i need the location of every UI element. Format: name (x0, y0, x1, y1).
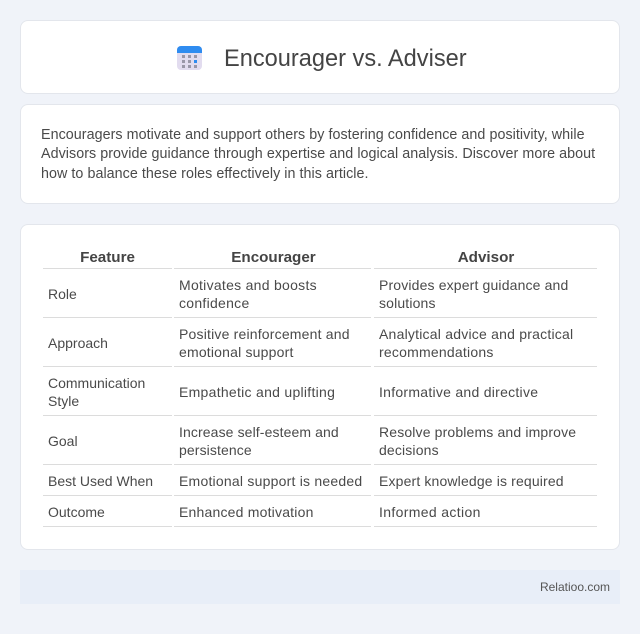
row: role (48, 277, 568, 311)
intro text: how to balance these roles effectively in this article. (41, 166, 369, 182)
table header: Feature (80, 249, 135, 266)
row: outcome: Informed action (379, 504, 481, 520)
row: best used when: Best Used When (48, 473, 153, 489)
row: goal: decisions (379, 442, 439, 458)
row: approach: Positive reinforcement and (179, 326, 350, 342)
row: role: Role (48, 286, 77, 302)
row: role: Motivates and boosts (179, 277, 317, 293)
table header: Advisor (458, 249, 514, 266)
intro text: Advisors provide guidance through expertise and logical analysis. Discover more about (41, 146, 595, 162)
row: outcome (48, 504, 481, 520)
footer bar (20, 570, 620, 604)
title: Encourager vs. Adviser (224, 46, 467, 72)
intro text: Encouragers motivate and support others by fostering confidence and positivity, while (41, 127, 585, 143)
row: best used when: Expert knowledge is required (379, 473, 564, 489)
icon: calendar (177, 46, 202, 70)
row: goal: persistence (179, 442, 252, 458)
row: approach (48, 326, 573, 360)
row: best used when (48, 473, 564, 489)
row: approach: Analytical advice and practical (379, 326, 573, 342)
row: goal: Resolve problems and improve (379, 424, 576, 440)
title card (20, 20, 620, 94)
row: outcome: Outcome (48, 504, 105, 520)
row: communication style: Empathetic and uplifting (179, 384, 335, 400)
table header: Encourager (231, 249, 316, 266)
row: communication style: Style (48, 393, 79, 409)
row: approach: recommendations (379, 344, 494, 360)
row: outcome: Enhanced motivation (179, 504, 314, 520)
row: approach: emotional support (179, 344, 294, 360)
table header (80, 249, 514, 266)
row: communication style: Informative and directive (379, 384, 538, 400)
row: goal: Goal (48, 433, 78, 449)
row: goal: Increase self-esteem and (179, 424, 339, 440)
intro card (20, 104, 620, 204)
row: approach: Approach (48, 335, 108, 351)
row: role: solutions (379, 295, 436, 311)
footer text: Relatioo.com (540, 580, 610, 594)
row: role: Provides expert guidance and (379, 277, 568, 293)
row: communication style: Communication (48, 375, 145, 391)
row: role: confidence (179, 295, 250, 311)
row: best used when: Emotional support is needed (179, 473, 362, 489)
comparison table card (20, 224, 620, 550)
row: communication style (48, 375, 538, 409)
intro text (41, 127, 595, 182)
row: goal (48, 424, 576, 458)
